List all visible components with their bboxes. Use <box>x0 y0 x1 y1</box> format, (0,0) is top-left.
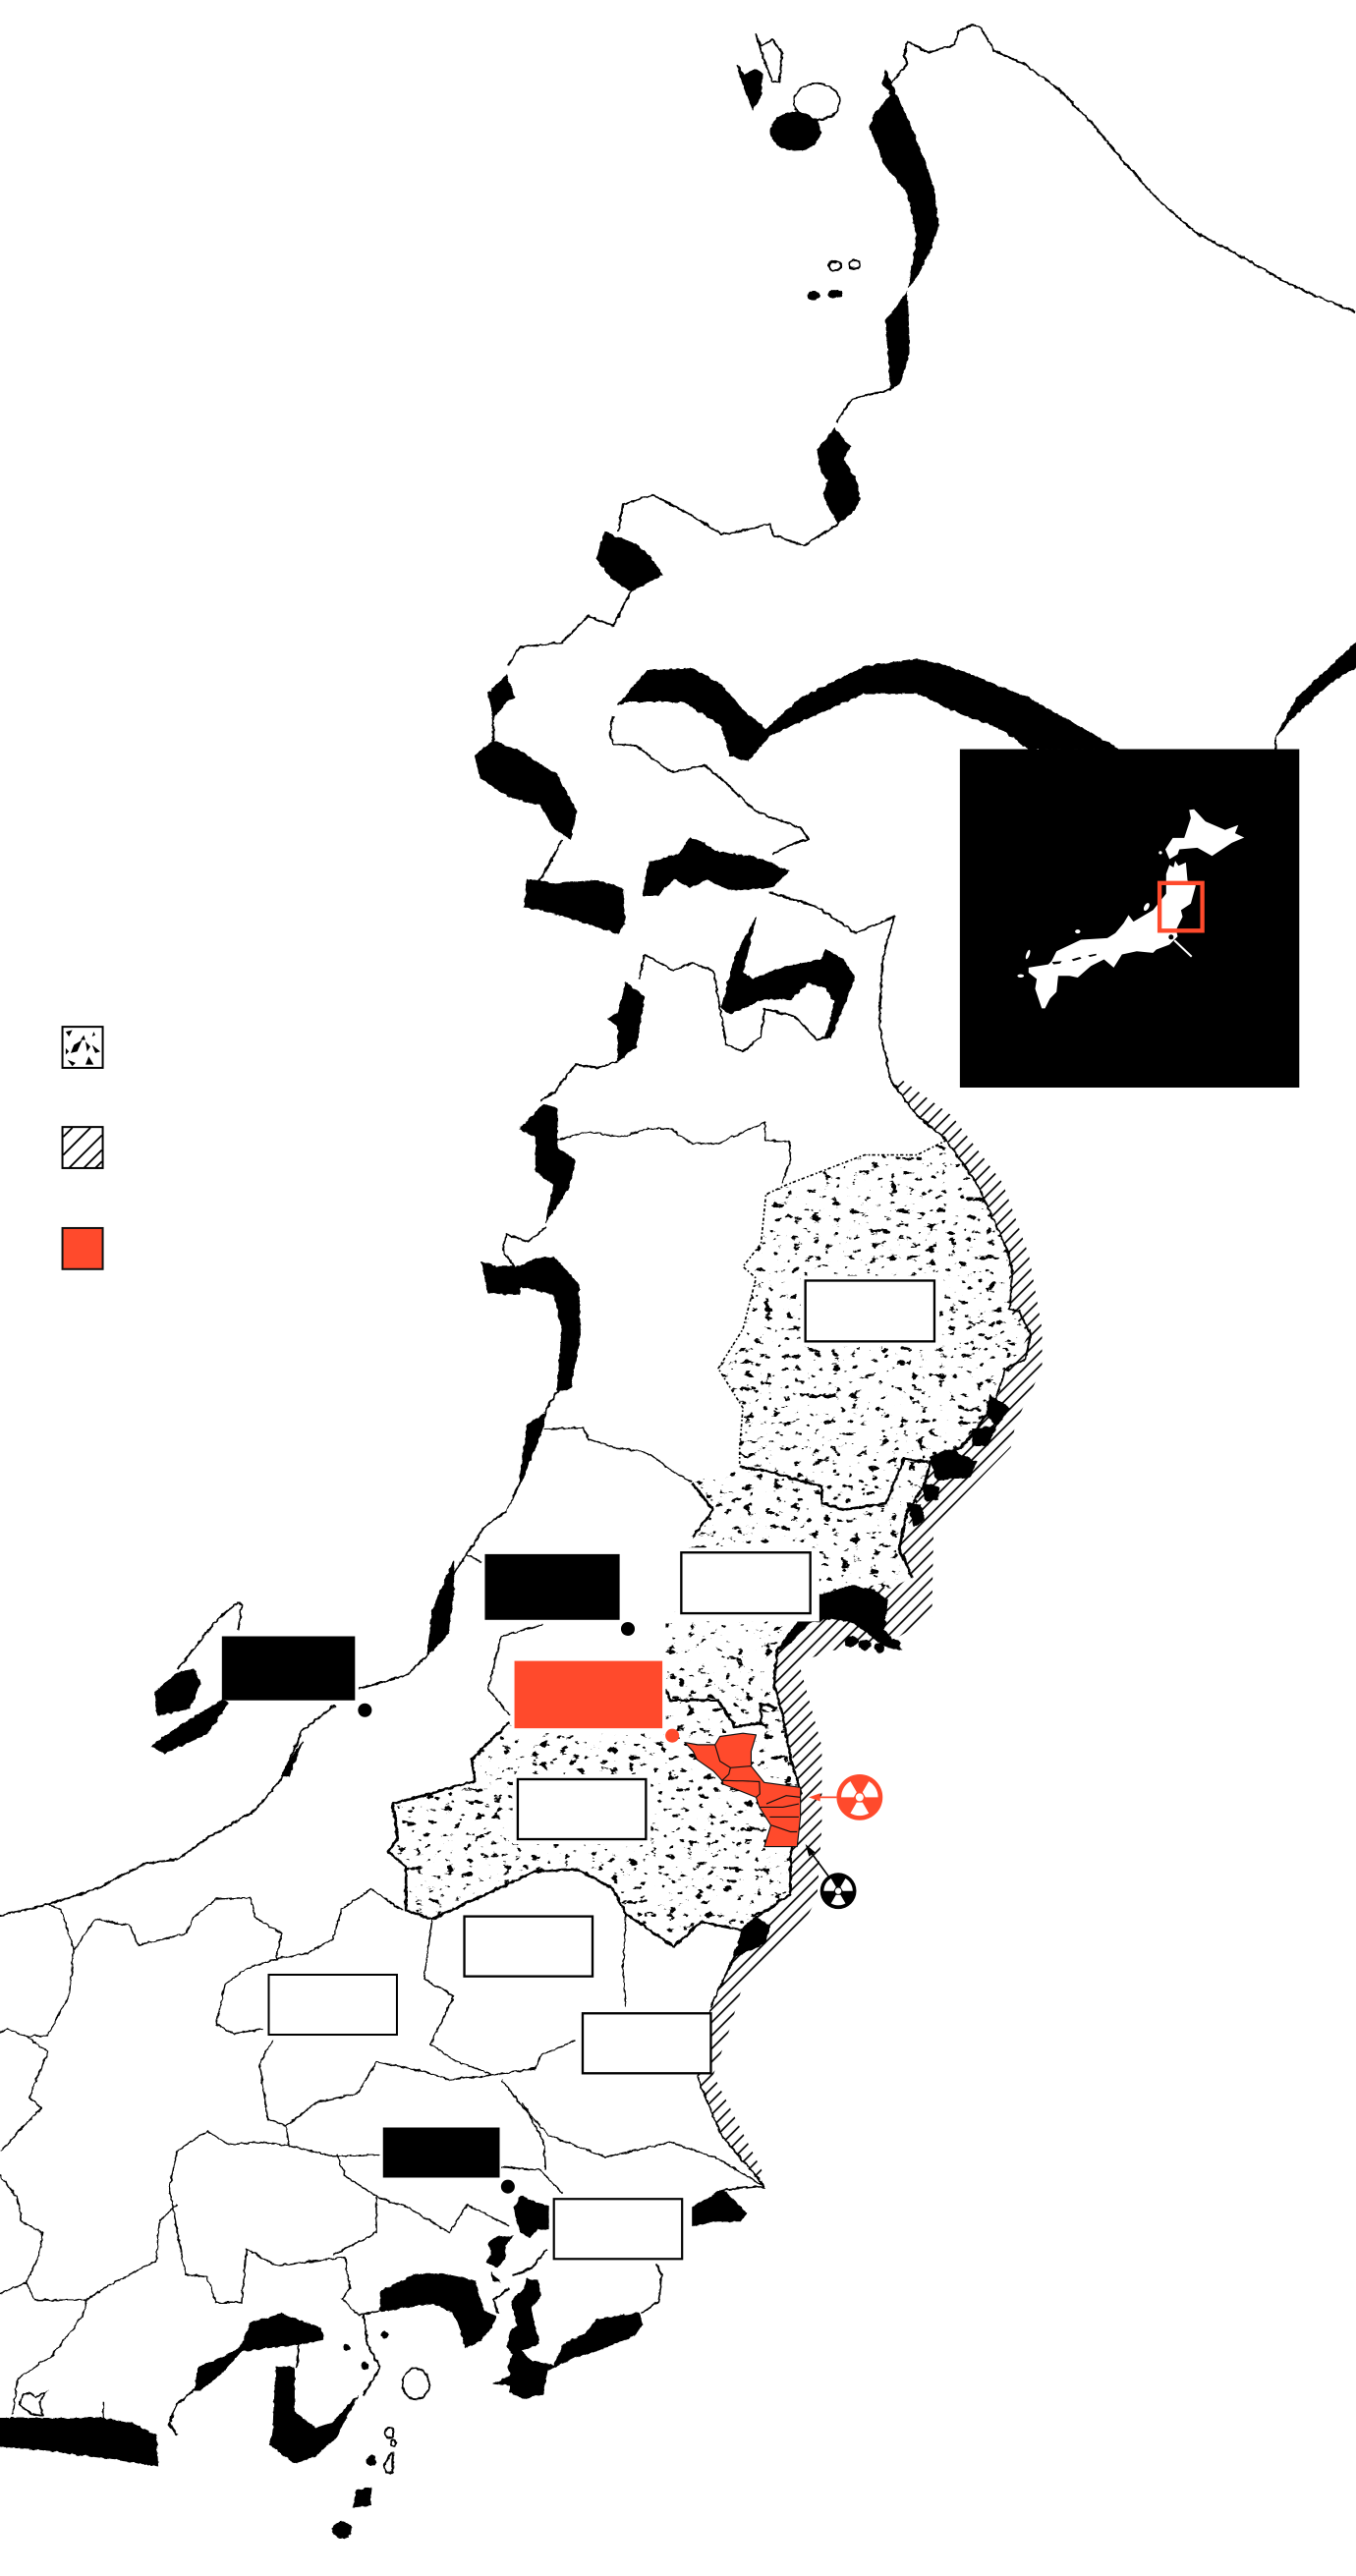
tsugaru west <box>608 982 645 1061</box>
west hokkaido strips <box>870 71 938 288</box>
label box: Miyagi <box>681 1552 811 1613</box>
sanriku coast fragments <box>987 1395 1009 1426</box>
inset: japan landmass <box>1017 810 1244 1008</box>
arrow: black to plant <box>806 1844 828 1876</box>
inset: leader line <box>1174 940 1192 957</box>
iwaki blob <box>726 1917 769 1972</box>
sado <box>154 1669 200 1715</box>
label box: Fukushima <box>518 1779 646 1839</box>
rebun and small island outlines <box>756 34 782 83</box>
icon: red radiation <box>836 1774 882 1820</box>
label box: Tochigi <box>465 1917 593 1977</box>
tokyo bay <box>515 2197 549 2238</box>
small islands <box>381 2331 387 2338</box>
lake hamana scribble <box>20 2392 46 2415</box>
inset: tokyo dot <box>1168 934 1173 939</box>
label box: red highlighted city <box>515 1661 662 1728</box>
boso <box>494 2278 642 2398</box>
inubo <box>688 2190 746 2227</box>
city dot: Tokyo <box>501 2180 515 2194</box>
speckled western outline of Iwate <box>718 1141 946 1464</box>
mutsu bay <box>721 917 855 1038</box>
matsushima and sendai bay <box>779 1586 901 1650</box>
hatched coastal region <box>697 1078 1043 2185</box>
thin coastline and prefecture borders <box>0 1122 791 2418</box>
legend swatch: hatched <box>63 1127 103 1168</box>
inset: locator map of Japan <box>960 750 1299 1088</box>
aomori west <box>525 879 625 933</box>
hokkaido south band <box>618 659 1119 760</box>
label box: Chiba <box>554 2199 682 2259</box>
rebun and rishiri fills <box>736 64 763 110</box>
label box: Tokyo <box>383 2127 500 2177</box>
south shizuoka <box>0 2418 158 2466</box>
thicker eastern coast <box>388 1403 994 1947</box>
stippled region: Iwate, Miyagi, Fukushima <box>395 1142 1028 1941</box>
icon: black radiation <box>820 1873 856 1909</box>
legend swatch: red zone <box>63 1228 103 1269</box>
city dot: Yamagata <box>621 1622 635 1636</box>
label box: Yamagata <box>484 1554 620 1620</box>
izu <box>269 2368 359 2463</box>
inset: inland sea specks <box>1052 954 1097 965</box>
city dot: red <box>665 1729 679 1743</box>
label box halos <box>511 1275 939 2264</box>
inset: red locator rectangle <box>1159 883 1203 930</box>
legend swatch: stippled <box>63 1027 103 1068</box>
arrow: red to evacuation zone <box>809 1793 836 1802</box>
label box: Ibaraki <box>583 2013 710 2073</box>
label box: Niigata <box>222 1637 355 1701</box>
red evacuation zone <box>685 1733 801 1847</box>
label box: Gunma <box>268 1975 397 2035</box>
northeast sliver <box>1275 643 1356 738</box>
label box: Iwate <box>806 1280 934 1341</box>
city dot: Niigata <box>358 1704 371 1717</box>
sagami bay <box>380 2273 496 2348</box>
